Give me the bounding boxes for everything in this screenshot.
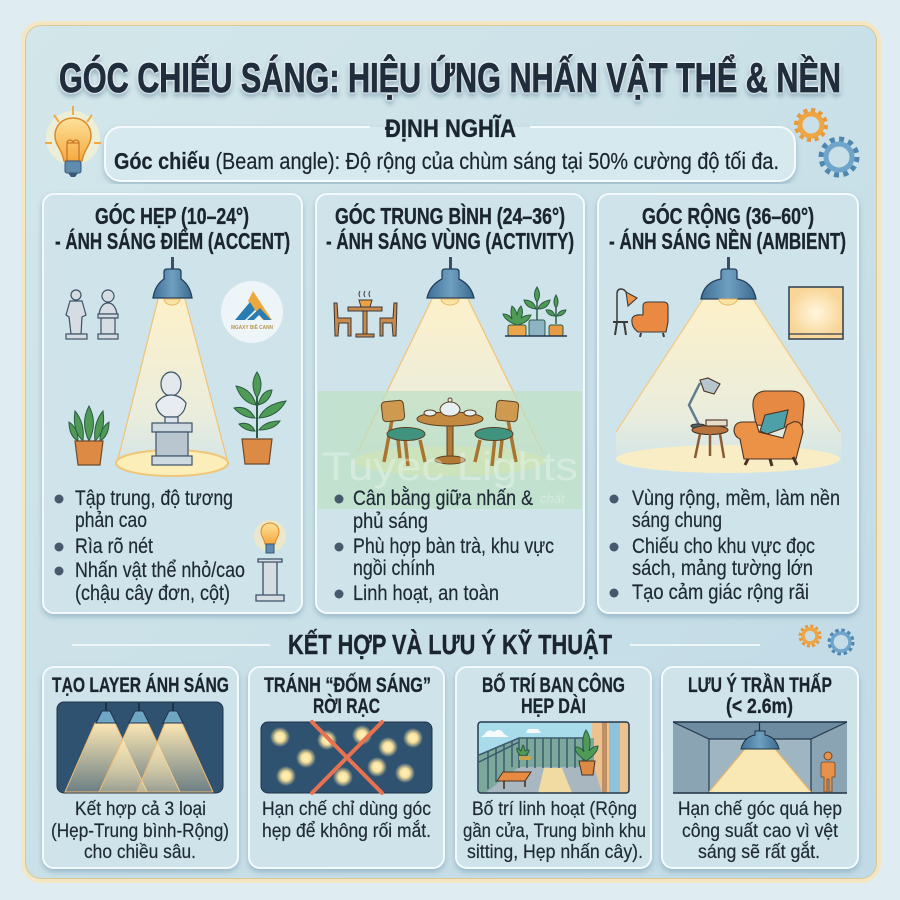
panel: medium beam [316, 194, 584, 613]
panel: definition [105, 113, 795, 181]
light beam [616, 299, 841, 473]
bullet list [610, 487, 840, 604]
card text [463, 798, 646, 863]
panel heading [609, 202, 846, 254]
icon: pendant lamp [153, 257, 192, 305]
light beam [116, 299, 228, 476]
card text: Bố trí linh hoạt (Rộng [472, 798, 637, 820]
panel heading [326, 202, 574, 254]
bullet list [54, 487, 245, 605]
illustration: layered beams [57, 702, 223, 793]
card heading: LƯU Ý TRẦN THẤP [688, 673, 832, 697]
table and chairs [381, 398, 519, 466]
card heading: RỜI RẠC [313, 694, 380, 718]
card text: (Hẹp-Trung bình-Rộng) [51, 820, 229, 842]
panel heading: GÓC HẸP (10–24°) [95, 202, 249, 229]
card text [51, 798, 229, 863]
watermark: chất [540, 491, 566, 506]
bullet list: phủ sáng [353, 510, 428, 533]
bullet list: Chiếu cho khu vực đọc [632, 535, 815, 558]
bullet list: Tập trung, độ tương [75, 487, 233, 510]
bullet list: ngồi chính [353, 557, 435, 580]
bullet list [334, 487, 554, 605]
card heading: TRÁNH “ĐỐM SÁNG” [264, 673, 431, 697]
icon: light bulb [45, 106, 101, 177]
card text: gần cửa, Trung bình khu [463, 820, 646, 842]
panel heading [55, 202, 290, 254]
card heading [482, 673, 625, 718]
illustration: balcony [478, 722, 629, 793]
bust on pedestal [152, 372, 192, 465]
bullet list: sách, mảng tường lớn [632, 557, 813, 580]
icon: pendant lamp [427, 257, 474, 305]
icon: small gears [800, 626, 853, 654]
card heading: BỐ TRÍ BAN CÔNG [482, 673, 625, 697]
icon: small statues [66, 290, 118, 339]
illustration: spots with cross [261, 722, 432, 793]
illustration: low ceiling room [673, 722, 847, 793]
icon: gears [796, 110, 857, 175]
icon: small plants [503, 287, 567, 336]
definition text: Góc chiếu (Beam angle): Độ rộng của chùm sáng tại 50% cường độ tối đa. [114, 148, 779, 174]
icon: lit wall panel [789, 287, 843, 339]
panel heading: - ÁNH SÁNG ĐIỂM (ACCENT) [55, 227, 290, 254]
watermark band [318, 391, 582, 509]
icon: small table and chairs [334, 291, 397, 337]
bullet list: phản cao [75, 509, 147, 532]
card text [678, 798, 842, 863]
bullet list: Phù hợp bàn trà, khu vực [353, 535, 554, 558]
icon: bulb on column [254, 520, 286, 601]
definition heading: ĐỊNH NGHĨA [385, 113, 516, 143]
card: scattered spots [249, 667, 444, 868]
bullet list: Nhấn vật thể nhỏ/cao [75, 559, 245, 582]
card text: Kết hợp cả 3 loại [75, 798, 206, 820]
bullet list: Tạo cảm giác rộng rãi [632, 581, 809, 604]
card: low ceiling [662, 667, 858, 868]
card: narrow balcony [456, 667, 651, 868]
card text: Hạn chế góc quá hẹp [678, 798, 842, 820]
bullet list: (chậu cây đơn, cột) [75, 582, 230, 605]
card heading [264, 673, 431, 718]
card heading [688, 673, 832, 718]
panel: wide beam [598, 194, 858, 613]
bullet list: Vùng rộng, mềm, làm nền [632, 487, 840, 510]
icon: small armchair and lamp [613, 289, 668, 337]
icon: potted plant left [69, 406, 109, 465]
card text [262, 798, 431, 842]
panel heading: - ÁNH SÁNG VÙNG (ACTIVITY) [326, 227, 574, 254]
card text: Hạn chế chỉ dùng góc [262, 798, 431, 820]
bullet list: Linh hoạt, an toàn [353, 582, 499, 605]
card text: sáng sẽ rất gắt. [698, 840, 820, 863]
card text: công suất cao vì vệt [682, 820, 839, 842]
icon: pendant lamp [701, 257, 756, 305]
bullet list: Cân bằng giữa nhấn & [353, 487, 533, 510]
icon: logo badge: MGAXY BIỀ CANN [231, 324, 273, 331]
panel heading: GÓC TRUNG BÌNH (24–36°) [335, 202, 565, 229]
watermark: Tuyec Lights [322, 445, 578, 489]
card: layering [43, 667, 238, 868]
watermark [322, 445, 578, 506]
card heading: HẸP DÀI [521, 695, 586, 718]
reading lamp, side table and armchair [689, 378, 804, 466]
icon: logo badge [221, 281, 283, 343]
card text: hẹp để không rối mắt. [262, 819, 431, 842]
card heading: TẠO LAYER ÁNH SÁNG [52, 674, 229, 697]
bullet list: Rìa rõ nét [75, 535, 153, 558]
bullet list: sáng chung [632, 509, 722, 532]
card text: cho chiều sâu. [84, 841, 196, 863]
section heading: KẾT HỢP VÀ LƯU Ý KỸ THUẬT [288, 629, 612, 660]
card heading: (< 2.6m) [726, 695, 793, 718]
card text: sitting, Hẹp nhấn cây). [467, 841, 643, 863]
light beam [354, 299, 546, 476]
panel heading: GÓC RỘNG (36–60°) [642, 202, 814, 229]
panel: narrow beam [43, 194, 302, 613]
icon: potted plant right [234, 372, 286, 464]
